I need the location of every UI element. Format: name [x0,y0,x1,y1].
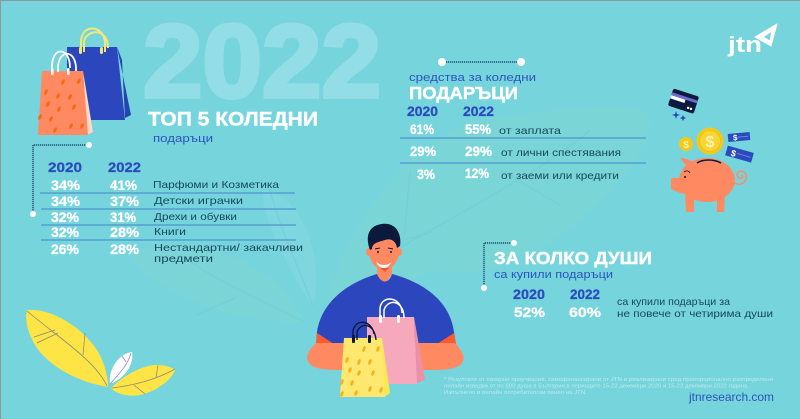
subheading: gifts: подаръци [153,133,213,145]
large year 2022: 2022 [143,4,381,120]
table: top 5 gifts: 26% [51,241,80,257]
stats: people: 2020 [513,286,545,302]
stats: people: са купили подаръци за [617,296,730,308]
table: top 5 gifts: Детски играчки [154,195,243,207]
table: top 5 gifts: 32% [51,209,80,225]
table: funding: 2022 [463,103,494,119]
icon: coins and bills: $ [733,133,738,143]
panel: top 5 gifts [30,110,318,265]
table: top 5 gifts: 2022 [108,159,141,175]
dotted connector [481,240,517,291]
stats: people: 2022 [570,286,600,302]
table: top 5 gifts: 28% [110,241,140,257]
stats: people: 60% [569,304,602,320]
icon: coins and bills: $ [706,134,715,151]
heading: gifts: ПОДАРЪЦИ [409,83,518,103]
subheading: bought gifts: са купили подаръци [494,269,613,281]
stats: people: не повече от четирима души [617,308,773,320]
dotted connector [438,58,525,66]
table: top 5 gifts: 2020 [48,159,82,175]
dotted connector [30,142,92,217]
heading: top 5: ТОП 5 КОЛЕДНИ [148,110,318,130]
table: funding: 29% [465,143,493,159]
table: funding: 2020 [407,103,438,119]
table: top 5 gifts: Книги [154,226,186,238]
table: top 5 gifts: 28% [110,224,140,240]
icon: yellow leaves [26,310,175,396]
table: funding [400,103,646,182]
icon: coins and bills: $ [683,140,689,151]
logo: jtn [727,24,777,57]
heading: how many people: ЗА КОЛКО ДУШИ [494,248,652,268]
footnote: онлайн извадки от по 600 души в България,в периодите 15-22 декември 2020 и 15-22 декември 2022 година. [444,382,749,390]
table: top 5 gifts: 34% [51,193,81,209]
stats: people [513,286,773,320]
footnote: * Резултати от пазарни проучвания, самофинансирани от JTN и реализирани сред пропорционално разпределени [444,377,773,383]
icon: shopping bags [37,28,131,135]
table: funding: 55% [465,121,492,137]
logo: jtn: jtn [727,32,762,57]
table: funding: от лични спестявания [501,147,621,159]
website link: jtnresearch.com [688,390,774,404]
stats: people: 52% [514,304,546,320]
panel: how many people [481,240,773,320]
table: top 5 gifts: предмети [154,253,213,265]
illustration: man with shopping bags [307,224,464,397]
table: top 5 gifts [40,159,303,265]
table: funding: от заплата [499,125,561,137]
panel: funding sources [400,58,646,182]
icon: coins and bills: $ [730,148,737,159]
table: funding: 29% [410,143,437,159]
table: funding: от заеми или кредити [501,170,619,182]
table: top 5 gifts: 31% [110,209,137,225]
icon: credit card [668,88,699,121]
background leaves [130,106,651,340]
table: top 5 gifts: 32% [51,224,80,240]
footnote: Изпълнено в онлайн потребителски панел на JTN. [444,389,587,396]
table: funding: 3% [417,166,435,182]
icon: coins and bills [679,128,754,164]
table: funding: 12% [465,165,489,181]
table: top 5 gifts: Дрехи и обувки [154,211,237,223]
table: top 5 gifts: 37% [110,193,140,209]
subheading: funds: средства за коледни [409,72,536,84]
table: top 5 gifts: Парфюми и Козметика [153,179,279,191]
icon: piggy bank [671,158,746,212]
table: top 5 gifts: 34% [51,177,81,193]
table: top 5 gifts: Нестандартни/ закачливи [154,242,303,254]
table: top 5 gifts: 41% [110,177,138,193]
footnote [444,377,773,396]
table: funding: 61% [410,121,434,137]
